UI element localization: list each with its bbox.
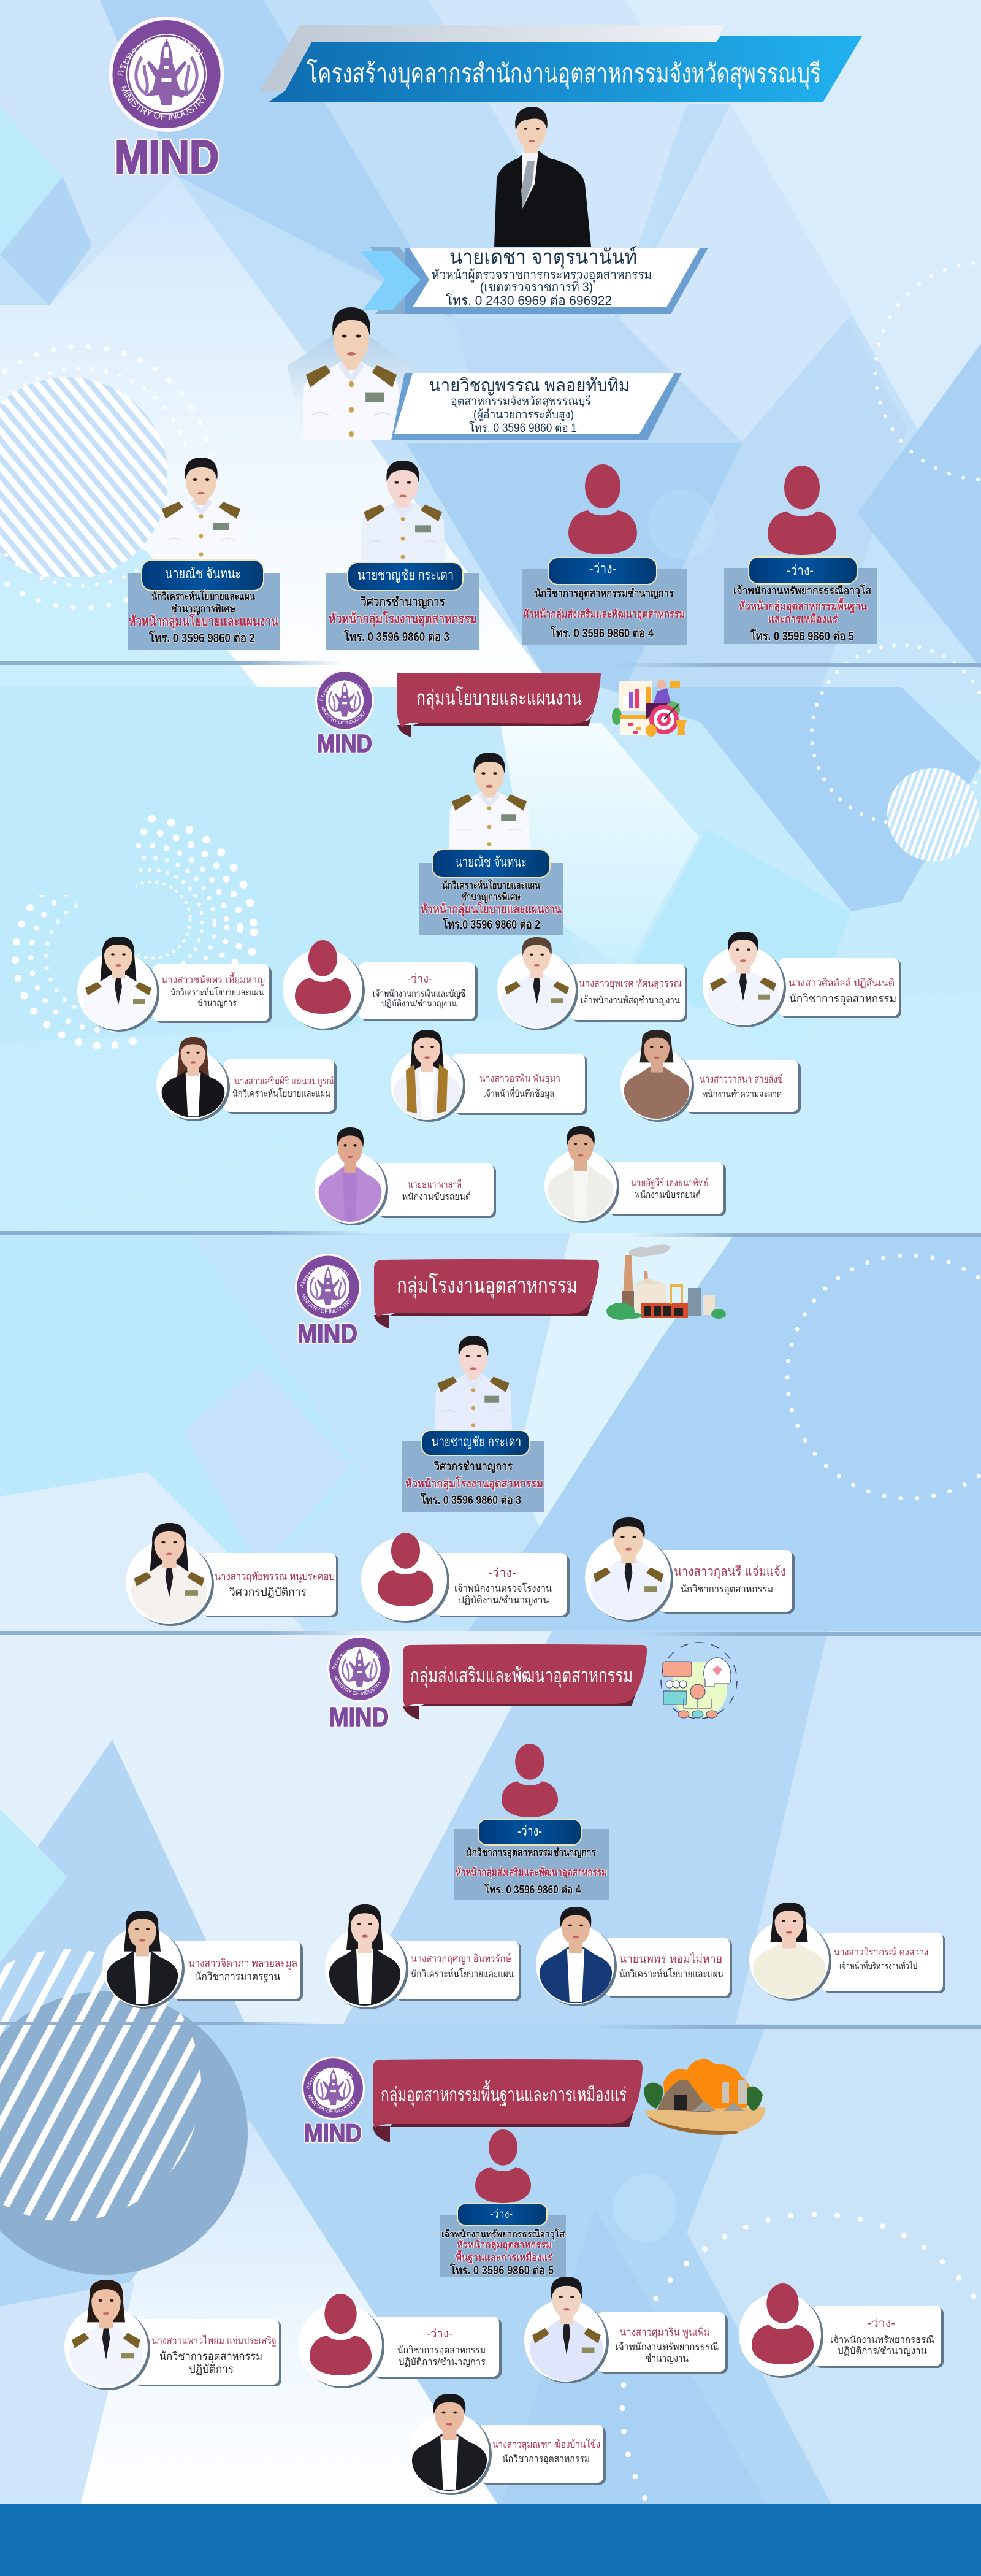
text: หัวหน้ากลุ่มส่งเสริมและพัฒนาอุตสาหกรรม [523,608,685,621]
name and contact: (เขตตรวจราชการที่ 3) [480,278,593,294]
logo wordmark: MIND: MIND [115,131,219,183]
section 3 logo [327,1635,392,1703]
text [788,977,896,1005]
text: นักวิเคราะห์นโยบายและแผน [442,879,540,891]
text: พนักงานขับรถยนต์ [402,1190,471,1202]
text [492,2438,600,2465]
section 3 logo: MINISTRY OF INDUSTRY [334,1676,382,1695]
portrait: Wichayaphan with hexagon frame [287,307,413,440]
section 2 logo: MINISTRY OF INDUSTRY [302,1294,351,1314]
text: โทร. 0 3596 9860 ต่อ 5 [449,2263,554,2277]
text: -ว่าง- [407,973,432,986]
text: -ว่าง- [517,1823,542,1839]
staff card: Kunnari [585,1517,795,1622]
head card: Nat (section 1) [419,753,563,935]
text: นักวิชาการอุตสาหกรรม [397,2345,486,2356]
text: นางสาวศิลลัลล์ ปฏิสันเนติ [788,977,895,989]
text [674,1565,786,1595]
name and contact: โทร. 0 2430 6969 ต่อ 696922 [446,293,612,308]
text [402,1179,471,1202]
text: -ว่าง- [868,2317,895,2330]
portrait [162,1037,224,1117]
section 2 logo [295,1254,361,1321]
text: นางสาวชนัตพร เหี้ยมหาญ [161,972,265,986]
text [405,1434,543,1507]
text: นักวิชาการอุตสาหกรรมชำนาญการ [466,1847,597,1859]
text [733,562,872,643]
text: นางสาวยุพเรศ ทัศนสุวรรณ [579,978,682,990]
text [616,2325,719,2364]
heading text: กลุ่มอุตสาหกรรมพื้นฐานและการเหมืองแร่ [381,2080,627,2107]
logo: Ministry of Industry [109,17,224,132]
text: นักวิชาการอุตสาหกรรม [159,2350,262,2364]
text: -ว่าง- [490,2208,513,2221]
portrait [540,1907,612,2003]
title banner [260,25,862,102]
text: โทร. 0 3596 9860 ต่อ 3 [420,1493,521,1507]
section 3 wordmark: MIND [329,1702,389,1732]
text: นักวิเคราะห์นโยบายและแผน [170,987,264,998]
text: ปฏิบัติงาน/ชำนาญงาน [381,999,457,1009]
text: นางสาวอรพิน พันธุมา [479,1073,560,1085]
text: หัวหน้ากลุ่มโรงงานอุตสาหกรรม [329,611,477,627]
portrait [83,937,154,1029]
section 2 wordmark: MIND [297,1319,357,1349]
text: โทร. 0 3596 9860 ต่อ 4 [484,1883,581,1896]
text: หัวหน้ากลุ่มส่งเสริมและพัฒนาอุตสาหกรรม [456,1866,607,1879]
logo: Ministry of Industry: กระทรวงอุตสาหกรรม [118,36,204,76]
text: นางสาวจิราภรณ์ คงสว่าง [834,1946,928,1958]
section 4 logo: MINISTRY OF INDUSTRY [308,2094,356,2114]
text: นักวิชาการอุตสาหกรรม [789,992,896,1005]
text: พนักงานขับรถยนต์ [635,1189,701,1200]
staff card: Sumarin [524,2277,728,2383]
text: วิศวกรชำนาญการ [360,595,446,610]
head card: Nat [128,458,280,650]
text: นายนพพร หอมไม่หาย [619,1952,722,1966]
text [215,1571,335,1599]
text: นักวิเคราะห์นโยบายและแผน [151,590,255,602]
text: -ว่าง- [427,2328,452,2340]
portrait [394,1030,460,1118]
text: นักวิเคราะห์นโยบายและแผน [411,1968,514,1980]
text: นางสาวกฤศญา อินทรรักษ์ [411,1953,511,1965]
heading text: กลุ่มส่งเสริมและพัฒนาอุตสาหกรรม [410,1664,633,1688]
plaque: Decha [360,245,708,314]
text: เจ้าหน้าที่บันทึกข้อมูล [483,1087,554,1099]
text: -ว่าง- [488,1566,516,1580]
staff card: vacant academic [299,2294,502,2388]
section 3 wordmark: MIND [329,1702,389,1732]
text: หัวหน้ากลุ่มนโยบายและแผนงาน [129,613,279,630]
text: วิศวกรปฏิบัติการ [229,1586,307,1599]
text: โทร. 0 3596 9860 ต่อ 3 [343,629,449,644]
text: นางสาวกุลนรี แจ่มแจ้ง [674,1565,786,1579]
text: หัวหน้ากลุ่มอุตสาหกรรม [457,2239,552,2251]
text: โทร. 0 3596 9860 ต่อ 2 [148,631,255,645]
text: เจ้าหน้าที่บริหารงานทั่วไป [839,1960,917,1971]
logo: Ministry of Industry: MINISTRY OF INDUSTRY [120,85,206,120]
section 2 logo: กระทรวงอุตสาหกรรม [300,1265,349,1288]
portrait [753,1903,825,1998]
text: เจ้าพนักงานทรัพยากรธรณี [830,2334,934,2345]
staff card: vacant mineral resources [739,2283,944,2378]
text [188,1957,297,1983]
icon: policy and planning target [612,680,687,737]
section 1 wordmark: MIND [317,729,372,757]
text: โทร. 0 3596 9860 ต่อ 4 [550,626,654,640]
text [479,1073,560,1099]
text: พื้นฐานและการเหมืองแร่ [456,2250,552,2264]
text [700,1073,783,1100]
section 1 logo: กระทรวงอุตสาหกรรม [319,680,363,702]
text [151,2334,277,2376]
section 1 logo [315,670,374,731]
head card: Chanchai (section 2) [402,1336,544,1512]
text: ปฏิบัติงาน/ชำนาญงาน [458,1595,549,1606]
text [523,561,685,640]
text: นางสาวแพรวไพยม แจ่มประเสริฐ [151,2334,277,2347]
text: -ว่าง- [589,561,616,577]
footer bar [0,2504,981,2576]
staff card: Wasana [620,1030,801,1122]
text: และการเหมืองแร่ [768,613,838,625]
text [397,2328,486,2367]
text: เจ้าพนักงานทรัพยากรธรณี [616,2341,719,2353]
text [161,972,265,1008]
text: เจ้าพนักงานตรวจโรงงาน [454,1582,552,1594]
text: นักวิชาการมาตรฐาน [195,1971,280,1983]
text: โทร. 0 3596 9860 ต่อ 5 [750,629,854,643]
section 4 wordmark: MIND [304,2118,362,2147]
section 4 wordmark: MIND [304,2118,362,2147]
section 3 ribbon heading [403,1644,647,1720]
staff card: Atthawi [544,1126,726,1223]
text: เจ้าพนักงานการเงินและบัญชี [373,989,465,999]
text: หัวหน้ากลุ่มนโยบายและแผนงาน [421,902,562,917]
text: หัวหน้ากลุ่มโรงงานอุตสาหกรรม [405,1476,543,1491]
text [579,978,682,1006]
text [441,2208,565,2277]
text: นายชาญชัย กระเดา [357,567,454,583]
text [232,1075,334,1099]
staff card: Jidapa [102,1911,303,2009]
section 3 logo: กระทรวงอุตสาหกรรม [332,1647,380,1669]
text [129,565,279,645]
text: นางสาววาสนา สายสังข์ [700,1073,783,1085]
title text: โครงสร้างบุคลากรสำนักงานอุตสาหกรรมจังหวัดสุพรรณบุรี [307,58,821,90]
section 1 ribbon heading [397,673,601,737]
portrait [708,932,779,1024]
portrait [131,1523,207,1622]
text: ปฏิบัติการ/ชำนาญการ [399,2357,486,2367]
icon: promotion and development [661,1643,737,1719]
text [619,1952,723,1980]
text: นางสาวเสริมศิริ แผนสมบูรณ์ [234,1075,334,1087]
staff card: Thana [315,1127,496,1225]
section 4 logo [302,2056,365,2120]
staff card: Oraphin [391,1030,587,1122]
section 2 ribbon heading [374,1259,599,1328]
text: พนักงานทำความสะอาด [703,1089,782,1100]
staff card: Jiraporn [749,1903,945,2001]
text [411,1953,514,1980]
text: -ว่าง- [787,562,814,578]
staff card: vacant finance [283,940,478,1030]
staff card: Ruethaiphan [126,1523,338,1626]
text [631,1177,709,1200]
head card: Chanchai [326,461,479,650]
section dividers [0,661,981,2029]
portrait [624,1030,689,1119]
text [456,1823,607,1896]
text [329,567,477,644]
section 4 ribbon heading [373,2059,643,2142]
text: นักวิเคราะห์นโยบายและแผน [232,1087,330,1099]
text: วิศวกรชำนาญการ [434,1460,513,1473]
text: นางสาวสุมณฑา ฆ้องบ้านโข้ง [492,2438,600,2451]
staff card: vacant factory inspector [361,1533,570,1623]
text: ชำนาญการพิเศษ [461,891,521,903]
section 2 wordmark: MIND [297,1319,357,1349]
text: นายชาญชัย กระเดา [432,1434,521,1449]
text: ปฏิบัติการ [189,2363,234,2376]
staff card: Phraewphayom [64,2280,281,2390]
icon: mine landscape [644,2059,765,2135]
head card: vacant (section 4) [440,2129,566,2277]
staff card: Sillalan [703,932,901,1027]
text: นักวิชาการอุตสาหกรรม [502,2454,590,2465]
name and contact: หัวหน้าผู้ตรวจราชการกระทรวงอุตสาหกรรม [432,268,652,283]
head card: vacant basic industries [724,466,877,644]
text: นักวิเคราะห์นโยบายและแผน [619,1968,723,1980]
portrait [107,1911,178,2006]
staff card: Soemsiri [156,1037,337,1121]
text: นายธนา พาสาลี [408,1179,462,1190]
text: หัวหน้ากลุ่มอุตสาหกรรมพื้นฐาน [739,597,868,613]
text: ชำนาญการพิเศษ [171,603,235,615]
portrait [530,2277,603,2381]
name and contact: นายเดชา จาตุรนานันท์ [449,245,637,269]
portrait [590,1517,666,1619]
portrait [548,1126,613,1219]
heading text: กลุ่มนโยบายและแผนงาน [416,686,582,710]
name and contact [432,245,652,308]
text: นักวิชาการอุตสาหกรรมชำนาญการ [535,587,674,600]
text: โทร.0 3596 9860 ต่อ 2 [442,917,540,932]
text: นักวิชาการอุตสาหกรรม [681,1584,773,1595]
text: เจ้าพนักงานพัสดุชำนาญงาน [581,995,680,1006]
section 1 logo: MINISTRY OF INDUSTRY [321,707,365,725]
staff card: Sumontha [408,2394,606,2495]
text: นายณัช จันทนะ [165,565,241,581]
text: เจ้าพนักงานทรัพยากรธรณีอาวุโส [733,584,872,598]
heading text: กลุ่มโรงงานอุตสาหกรรม [397,1273,578,1299]
text [454,1566,552,1606]
text: นางสาวจิดาภา พลายละมูล [188,1957,297,1970]
text: ปฏิบัติการ/ชำนาญงาน [838,2346,927,2356]
text [421,854,562,932]
text: นางสาวฤทัยพรรณ หนูประคอบ [215,1571,335,1583]
portrait [329,1904,400,2006]
text: นายณัช จันทนะ [455,854,527,870]
portrait [319,1127,381,1222]
name and contact [429,376,630,435]
portrait [69,2280,143,2387]
portrait: Decha [494,107,591,247]
staff card: Yupares [497,937,687,1030]
plaque: Wichayaphan [391,373,682,440]
text: นางสาวศุมาริน พูนเพิ่ม [620,2325,710,2339]
text [373,973,465,1009]
text: นายอัฐวีร์ เฮงธนาพัทธ์ [631,1177,709,1189]
text: ชำนาญงาน [646,2353,689,2364]
head card: vacant (section 3) [454,1744,609,1900]
portrait [502,937,571,1027]
name and contact: อุตสาหกรรมจังหวัดสุพรรณบุรี [451,394,591,408]
icon: factory [606,1244,726,1320]
text: ชำนาญการ [197,998,237,1008]
text [834,1946,928,1971]
staff card: Chanattaporn [77,937,272,1032]
name and contact: นายวิชญพรรณ พลอยทับทิม [429,376,630,396]
staff card: Kritsaya [325,1904,521,2009]
name and contact: โทร. 0 3596 9860 ต่อ 1 [469,421,577,435]
section 4 logo: กระทรวงอุตสาหกรรม [307,2067,353,2089]
head card: vacant industrial promotion [522,464,687,645]
name and contact: (ผู้อำนวยการระดับสูง) [473,408,574,421]
portrait [412,2394,487,2491]
text [830,2317,934,2356]
text: เจ้าพนักงานทรัพยากรธรณีอาวุโส [441,2228,565,2241]
logo wordmark: MIND: MIND [115,131,219,183]
staff card: Noppharat [536,1907,732,2006]
section 1 wordmark: MIND [317,729,372,757]
